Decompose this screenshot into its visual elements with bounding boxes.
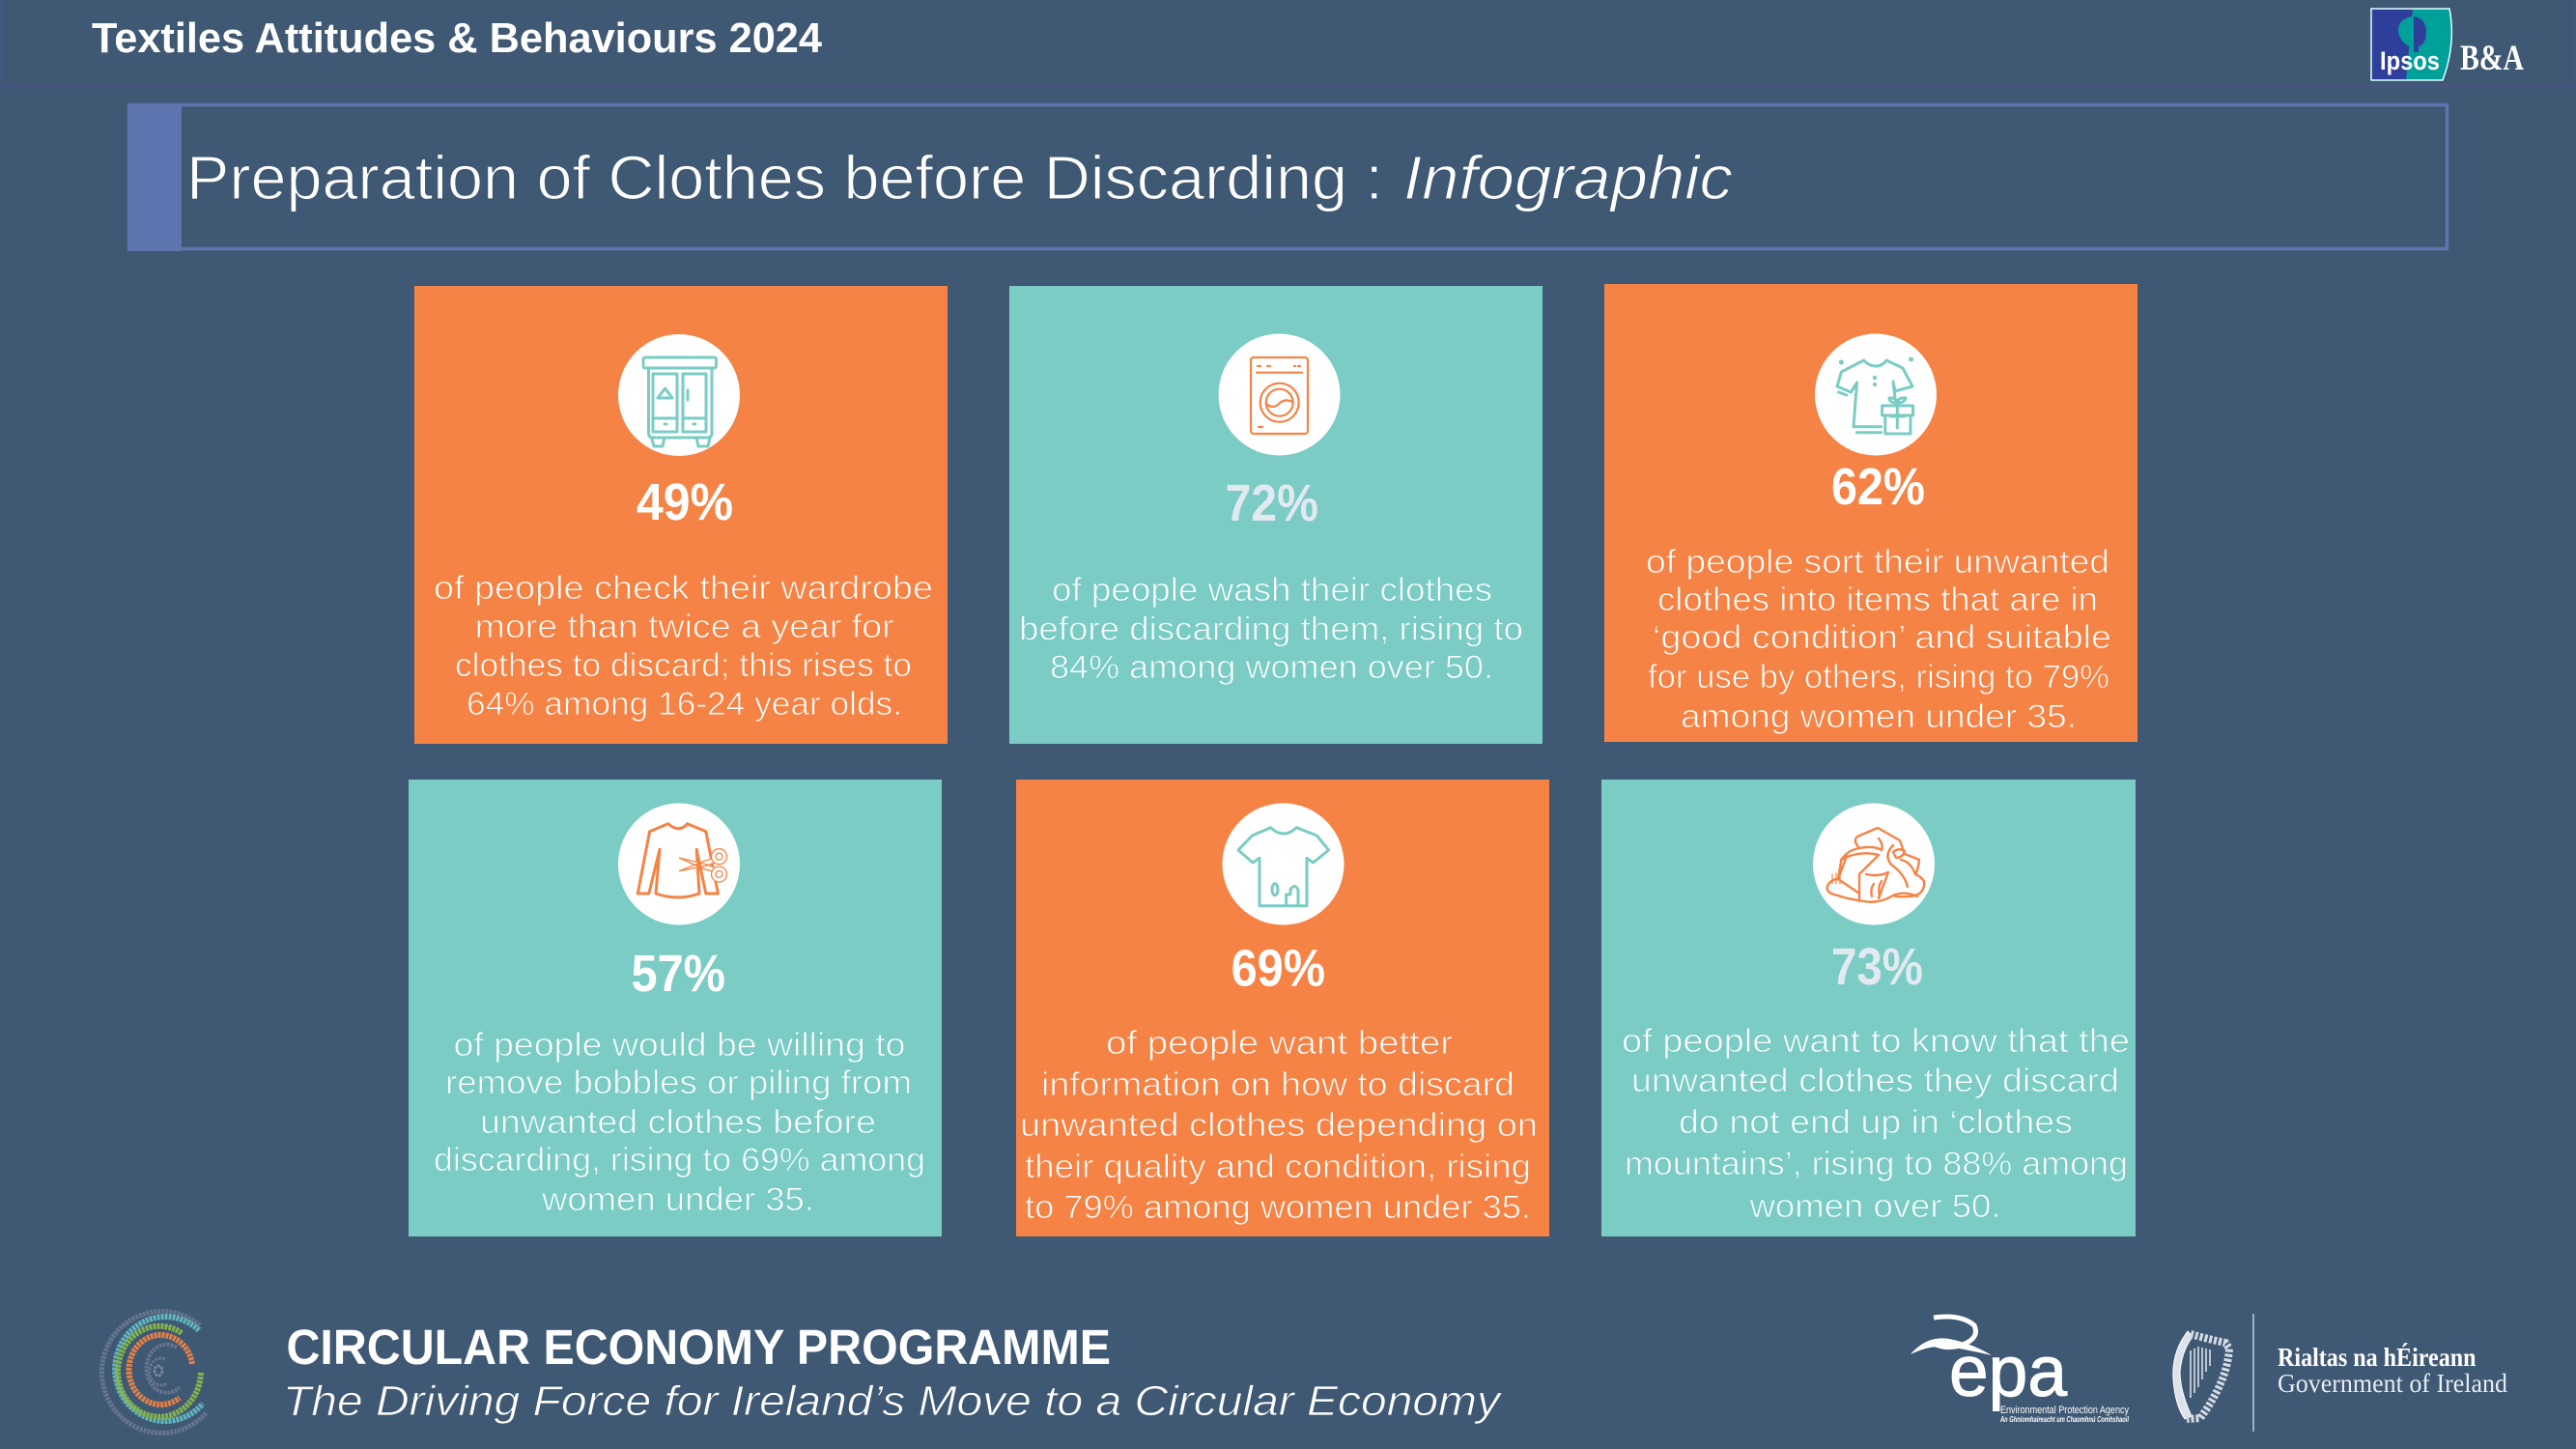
description: of people check their wardrobe: [434, 570, 933, 607]
stat: 73%: 73%: [1831, 938, 1923, 996]
icon: shirt and gift: [1815, 334, 1937, 456]
description: mountains’, rising to 88% among: [1625, 1146, 2128, 1182]
description: information on how to discard: [1041, 1066, 1514, 1103]
stat: 49%: 49%: [637, 473, 733, 531]
stat: 57%: 57%: [632, 945, 725, 1003]
stat: 62%: 62%: [1831, 458, 1925, 516]
logo: EPA: [1911, 1317, 2130, 1424]
slide title: Preparation of Clothes before Discarding :: [186, 143, 1383, 213]
description: women under 35.: [541, 1181, 814, 1218]
description: women over 50.: [1748, 1188, 2001, 1225]
logo: EPA: An Ghníomhaireacht um Chaomhnú Comhshaoil: [1999, 1415, 2130, 1424]
description: [434, 570, 933, 723]
description: of people sort their unwanted: [1646, 544, 2109, 581]
description: of people want better: [1106, 1025, 1453, 1062]
description: their quality and condition, rising: [1025, 1149, 1531, 1185]
description: ‘good condition’ and suitable: [1653, 619, 2111, 656]
icon: wardrobe: [618, 334, 740, 456]
government wordmark: Rialtas na hÉireann: [2278, 1343, 2477, 1372]
panel: wardrobe check 49%: [414, 286, 948, 744]
description: unwanted clothes they discard: [1631, 1063, 2119, 1099]
footer heading: CIRCULAR ECONOMY PROGRAMME: [286, 1320, 1111, 1375]
logo: EPA: Environmental Protection Agency: [2000, 1405, 2129, 1416]
description: discarding, rising to 69% among: [434, 1142, 925, 1179]
panel: sort clothes 62%: [1604, 284, 2137, 742]
icon: washing machine: [1219, 334, 1341, 456]
logo: EPA: epa: [1949, 1331, 2068, 1411]
description: unwanted clothes depending on: [1020, 1107, 1538, 1144]
icon: t-shirt with holes: [1223, 804, 1345, 925]
logo: Ipsos: Ipsos: [2380, 46, 2440, 75]
description: 84% among women over 50.: [1050, 649, 1493, 686]
description: do not end up in ‘clothes: [1679, 1104, 2073, 1141]
title banner: [127, 103, 2448, 251]
government wordmark: [2278, 1343, 2507, 1398]
panel: better information 69%: [1016, 780, 1549, 1236]
description: clothes to discard; this rises to: [455, 647, 912, 684]
stat: 72%: 72%: [1225, 474, 1318, 532]
description: among women under 35.: [1681, 698, 2077, 735]
description: to 79% among women under 35.: [1025, 1189, 1531, 1226]
description: of people would be willing to: [454, 1027, 906, 1064]
logo: Ipsos: [2371, 9, 2451, 80]
description: [1019, 572, 1523, 686]
description: clothes into items that are in: [1657, 582, 2098, 618]
header title: Textiles Attitudes & Behaviours 2024: [92, 14, 823, 62]
description: [434, 1027, 925, 1218]
description: [1646, 544, 2111, 735]
logo: harp: [2173, 1331, 2229, 1419]
divider: [2252, 1314, 2254, 1432]
description: unwanted clothes before: [480, 1104, 876, 1141]
logo: B&A: B&A: [2460, 39, 2524, 78]
description: remove bobbles or piling from: [445, 1065, 912, 1101]
description: [1622, 1023, 2130, 1225]
icon: heap of clothes: [1813, 804, 1935, 925]
description: of people want to know that the: [1622, 1023, 2130, 1060]
panel: clothes mountains 73%: [1601, 780, 2136, 1236]
panel: remove bobbles 57%: [409, 780, 942, 1236]
description: of people wash their clothes: [1052, 572, 1492, 609]
icon: jumper and scissors: [618, 804, 740, 925]
description: before discarding them, rising to: [1019, 611, 1523, 647]
description: more than twice a year for: [475, 609, 894, 645]
slide title suffix: Infographic: [1403, 143, 1733, 213]
description: for use by others, rising to 79%: [1648, 659, 2109, 696]
description: 64% among 16-24 year olds.: [467, 686, 902, 723]
description: [1020, 1025, 1538, 1226]
footer tagline: The Driving Force for Ireland’s Move to a Circular Economy: [283, 1378, 1503, 1425]
logo: circular economy rings: [101, 1311, 207, 1433]
government wordmark: Government of Ireland: [2278, 1369, 2507, 1398]
panel: wash clothes 72%: [1009, 286, 1543, 744]
stat: 69%: 69%: [1231, 940, 1325, 998]
